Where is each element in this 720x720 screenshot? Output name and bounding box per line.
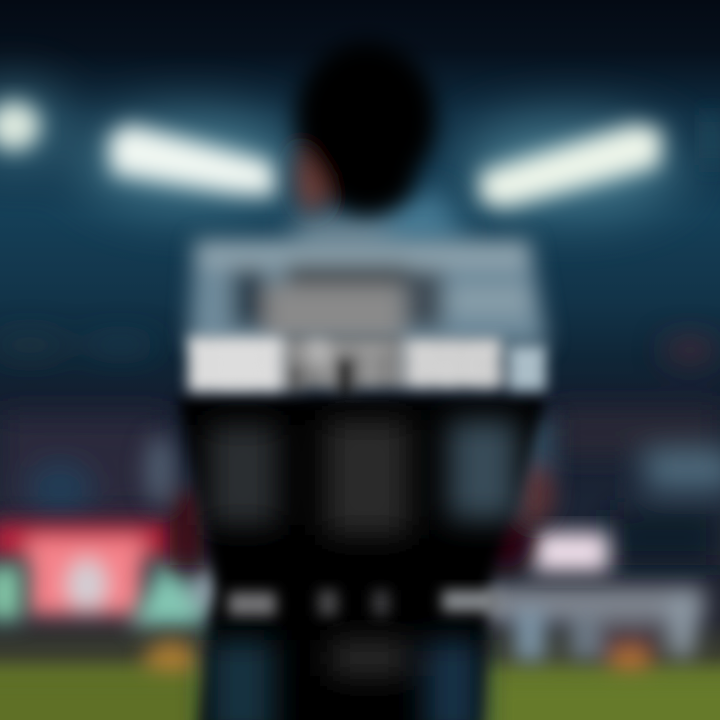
left floodlight: [108, 124, 276, 196]
right players strip: [440, 586, 705, 678]
football pitch: [0, 674, 720, 720]
floodlight glow: [0, 90, 680, 210]
jersey headline: BETTING: [217, 333, 515, 400]
left orange strip: [144, 640, 200, 684]
collar and shoulders: [295, 190, 470, 250]
jersey headline band: [188, 336, 546, 396]
arms: [144, 420, 555, 568]
jersey upper panel: [188, 240, 548, 345]
player head: [295, 42, 436, 214]
crowd stands: [0, 333, 720, 565]
stadium floodlights: [0, 90, 720, 210]
jersey lower panels: [208, 420, 518, 720]
jersey lower caption: [228, 590, 498, 616]
jersey lower body: [178, 398, 545, 720]
advertising boards: [0, 522, 705, 684]
right white board: [533, 532, 609, 572]
left green panels: [0, 555, 232, 626]
red board: [0, 522, 175, 616]
far right floodlight: [702, 115, 720, 165]
player silhouette: [144, 42, 555, 720]
far left floodlight: [0, 102, 40, 150]
right floodlight: [480, 124, 662, 208]
